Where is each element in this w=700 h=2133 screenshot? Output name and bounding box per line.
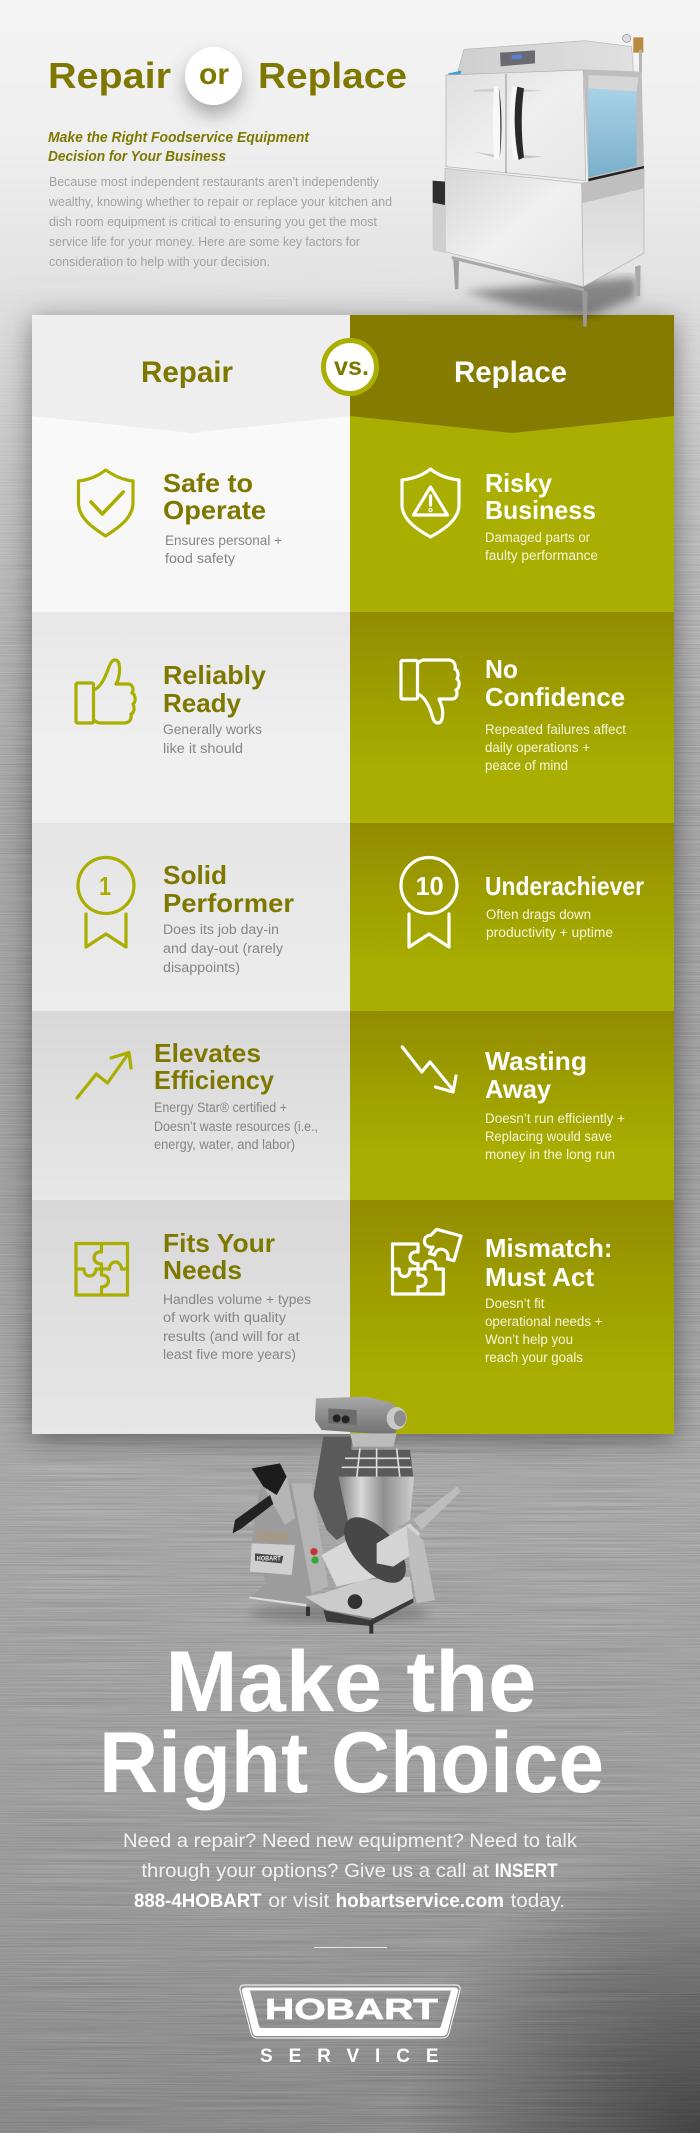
- call to action text: INSERT: [495, 1860, 558, 1882]
- row 2 left: reliably ready: like it should: [163, 741, 243, 756]
- row 5 right: mismatch: Doesn’t fit: [485, 1296, 545, 1311]
- header: Repair: Repair: [141, 356, 233, 389]
- intro text: [48, 174, 392, 269]
- row 2 right: no confidence: No: [485, 654, 518, 684]
- row 3 left: solid performer: and day-out (rarely: [163, 941, 283, 956]
- icon: shield warning: [402, 469, 459, 537]
- row 2 left: reliably ready: Ready: [163, 688, 242, 718]
- comparison panel: [32, 315, 674, 1434]
- title: Repair or Replace: Replace: [258, 55, 407, 96]
- row 2 right: no confidence: Confidence: [485, 682, 625, 712]
- row 1 left: safe to operate: food safety: [165, 551, 235, 566]
- icon: medal 1: [78, 858, 134, 947]
- subtitle: [48, 129, 310, 165]
- row 4 left: elevates efficiency: energy, water, and labor): [154, 1137, 295, 1152]
- header: Replace: [350, 315, 674, 433]
- row 5 right: mismatch: Won’t help you: [485, 1332, 573, 1347]
- badge: or: [185, 47, 242, 105]
- call to action text: Need a repair? Need new equipment? Need to talk: [123, 1830, 577, 1852]
- row 3 left: solid performer: Does its job day-in: [163, 922, 279, 937]
- row 1 left: safe to operate: Safe to: [163, 468, 253, 498]
- intro text: consideration to help with your decision.: [49, 254, 270, 269]
- icon: medal 1: 1: [99, 871, 111, 901]
- title: Repair or Replace: [48, 47, 407, 105]
- right column rows: [350, 416, 674, 1434]
- icon: thumbs up: [76, 660, 135, 723]
- icon: shield check: [78, 470, 133, 536]
- badge: vs.: vs.: [334, 353, 369, 381]
- row 5 left: fits your needs: of work with quality: [163, 1310, 286, 1325]
- row 1 right: risky business: Risky: [485, 468, 553, 498]
- header: Repair: [32, 315, 350, 433]
- row 4 left: elevates efficiency: Doesn’t waste resources (i.e.,: [154, 1119, 318, 1134]
- icon: puzzle: [76, 1244, 128, 1295]
- row 5 left: fits your needs: Fits Your: [163, 1228, 275, 1258]
- call to action text: today.: [511, 1890, 565, 1912]
- icon: medal 10: 10: [416, 871, 444, 901]
- row 4 right: wasting away: money in the long run: [485, 1147, 615, 1162]
- row 4 left: elevates efficiency: Energy Star® certified +: [154, 1100, 287, 1115]
- row 3 right: underachiever: Underachiever: [485, 871, 644, 901]
- row 5 right: mismatch: [392, 1229, 612, 1365]
- row 2 right: no confidence: [401, 654, 626, 773]
- icon: puzzle with loose piece: [392, 1229, 461, 1294]
- row 4 left: elevates efficiency: [77, 1038, 318, 1152]
- intro text: wealthy, knowing whether to repair or replace your kitchen and: [48, 194, 392, 209]
- call to action text: [123, 1830, 577, 1912]
- row 1 left: safe to operate: [78, 468, 282, 566]
- icon: medal 10: [401, 858, 457, 947]
- intro text: Because most independent restaurants aren't independently: [49, 174, 379, 189]
- row 3 right: underachiever: [401, 858, 644, 947]
- heading: Make the Right Choice: [99, 1634, 604, 1811]
- title: Repair or Replace: Repair: [48, 55, 171, 96]
- row 2 left: reliably ready: Generally works: [163, 722, 262, 737]
- row 2 left: reliably ready: [76, 660, 267, 756]
- call to action text: or visit: [268, 1890, 330, 1912]
- row 1 right: risky business: Damaged parts or: [485, 530, 590, 545]
- image: conveyor dishwasher: [433, 34, 644, 327]
- intro text: service life for your money. Here are some key factors for: [49, 234, 361, 249]
- heading: Make the Right Choice: Right Choice: [99, 1715, 604, 1811]
- row 5 left: fits your needs: [76, 1228, 311, 1362]
- row 3 left: solid performer: disappoints): [163, 960, 240, 975]
- logo: Hobart Service: [240, 1985, 460, 2067]
- heading: Make the Right Choice: Make the: [165, 1634, 536, 1730]
- row 5 right: mismatch: Mismatch:: [485, 1233, 612, 1263]
- row 5 left: fits your needs: results (and will for at: [163, 1329, 300, 1344]
- subtitle: Decision for Your Business: [48, 148, 226, 165]
- row 5 right: mismatch: reach your goals: [485, 1350, 583, 1365]
- row 2 right: no confidence: daily operations +: [485, 740, 590, 755]
- row 4 right: wasting away: Doesn’t run efficiently +: [485, 1111, 625, 1126]
- row 5 left: fits your needs: Needs: [163, 1255, 242, 1285]
- icon: trend down: [402, 1047, 456, 1092]
- image: mixer, food processor and slicer: HOBART: [257, 1555, 281, 1562]
- call to action text: 888-4HOBART: [134, 1890, 262, 1912]
- logo: Hobart Service: SERVICE: [260, 2046, 438, 2067]
- row 5 right: mismatch: Must Act: [485, 1262, 594, 1292]
- row 1 right: risky business: faulty performance: [485, 548, 598, 563]
- image: mixer, food processor and slicer: [233, 1397, 461, 1634]
- panel background: [32, 315, 674, 1434]
- row 3 left: solid performer: [78, 858, 294, 975]
- icon: thumbs down: [401, 660, 459, 723]
- row 1 right: risky business: [402, 468, 598, 563]
- row 3 right: underachiever: productivity + uptime: [486, 925, 613, 940]
- row 5 left: fits your needs: least five more years): [163, 1347, 296, 1362]
- row 4 left: elevates efficiency: Efficiency: [154, 1065, 275, 1095]
- row 4 right: wasting away: Replacing would save: [485, 1129, 612, 1144]
- row 4 left: elevates efficiency: Elevates: [154, 1038, 261, 1068]
- header: Replace: Replace: [454, 356, 567, 389]
- subtitle: Make the Right Foodservice Equipment: [48, 129, 310, 146]
- row 3 right: underachiever: Often drags down: [486, 907, 591, 922]
- row 3 left: solid performer: Solid: [163, 860, 227, 890]
- row 2 right: no confidence: peace of mind: [485, 758, 568, 773]
- row 5 right: mismatch: operational needs +: [485, 1314, 603, 1329]
- badge: vs.: [324, 340, 376, 394]
- logo: Hobart Service: HOBART: [265, 1994, 438, 2026]
- row 2 right: no confidence: Repeated failures affect: [485, 722, 626, 737]
- row 4 right: wasting away: [402, 1046, 625, 1162]
- row 4 right: wasting away: Wasting: [485, 1046, 587, 1076]
- row 4 right: wasting away: Away: [485, 1074, 552, 1104]
- call to action text: through your options? Give us a call at: [141, 1860, 490, 1882]
- row 1 left: safe to operate: Ensures personal +: [165, 533, 282, 548]
- badge: or: or: [199, 58, 229, 91]
- row 1 right: risky business: Business: [485, 495, 596, 525]
- row 2 left: reliably ready: Reliably: [163, 660, 267, 690]
- left column rows: [32, 416, 350, 1434]
- row 5 left: fits your needs: Handles volume + types: [163, 1292, 311, 1307]
- row 3 left: solid performer: Performer: [163, 888, 294, 918]
- icon: trend up: [77, 1052, 131, 1098]
- intro text: dish room equipment is critical to ensuring you get the most: [49, 214, 377, 229]
- row 1 left: safe to operate: Operate: [163, 495, 266, 525]
- call to action text: hobartservice.com: [336, 1890, 504, 1912]
